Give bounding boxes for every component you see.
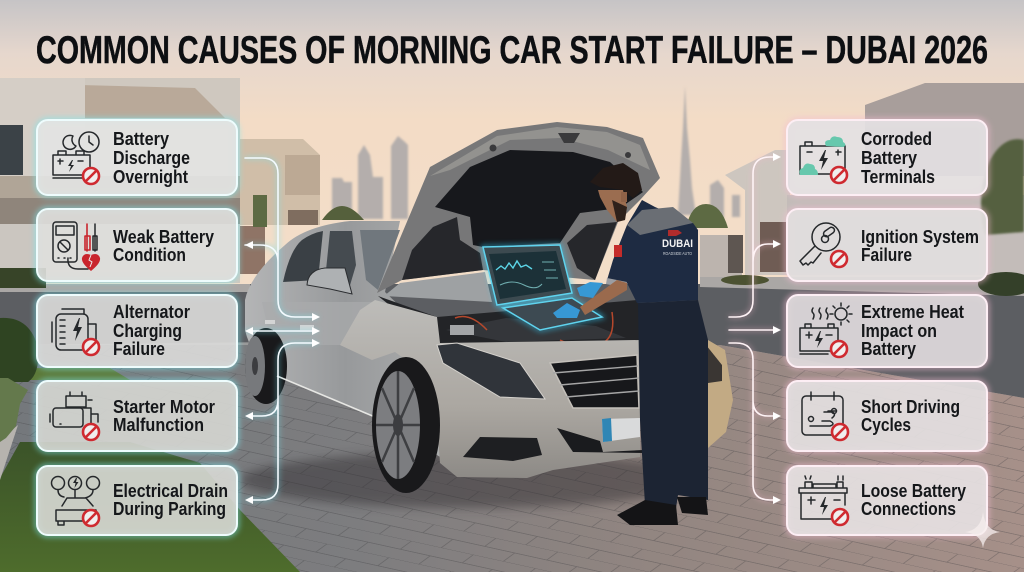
text: weak battery condition: Condition [113, 245, 186, 265]
front bumper and fender [340, 300, 640, 478]
text: weak battery condition: Weak Battery [113, 227, 215, 247]
chest logo [614, 230, 693, 257]
text: ignition system failure: Ignition System [861, 227, 979, 247]
paved driveway [0, 345, 1024, 572]
text: electrical drain during parking: Electrical Drain [113, 481, 228, 501]
road [0, 284, 1024, 398]
shadow under car [240, 452, 700, 508]
text: corroded battery terminals: Corroded [861, 129, 932, 149]
engine bay [378, 296, 650, 345]
text: starter motor malfunction: Starter Motor [113, 397, 215, 417]
panel: corroded battery terminals [787, 120, 987, 195]
icon: starter motor [50, 392, 99, 440]
sparkle mark [965, 512, 1000, 548]
text: short driving cycles: Cycles [861, 415, 911, 435]
text: starter motor malfunction: Malfunction [113, 415, 204, 435]
icon: calendar with route [802, 392, 848, 440]
windshield base [384, 272, 492, 302]
text: ignition system failure: Failure [861, 245, 912, 265]
text: loose battery connections: Loose Battery [861, 481, 967, 501]
text: alternator charging failure: Charging [113, 321, 182, 341]
car [245, 122, 733, 493]
head and hair [590, 163, 642, 222]
chest logo: DUBAI [662, 238, 693, 250]
forearm and gloves [580, 280, 627, 315]
headlight [437, 343, 545, 399]
skyline towers [332, 86, 740, 219]
number plate [602, 418, 640, 442]
text: extreme heat impact on battery: Extreme Heat [861, 302, 964, 322]
icon: car key [800, 223, 847, 267]
panel: short driving cycles [787, 381, 987, 451]
icon: loose battery [799, 476, 848, 525]
text: extreme heat impact on battery: Battery [861, 339, 917, 359]
icon: multimeter and broken heart [53, 222, 100, 271]
lower air intakes [463, 437, 542, 461]
text: corroded battery terminals: Terminals [861, 167, 935, 187]
chest logo: ROADSIDE AUTO [663, 251, 692, 256]
panel: extreme heat impact on battery [787, 295, 987, 367]
connectors: right side [729, 153, 781, 504]
text: short driving cycles: Short Driving [861, 397, 960, 417]
car side windows [283, 230, 400, 292]
panel: electrical drain during parking [37, 466, 237, 535]
rear wheel [245, 328, 287, 404]
boots [617, 497, 708, 525]
panel: ignition system failure [787, 209, 987, 281]
panel: weak battery condition [37, 209, 237, 281]
text: alternator charging failure: Alternator [113, 302, 190, 322]
lawn and plants [0, 318, 300, 572]
icon: battery, moon and clock [53, 132, 99, 184]
panel: loose battery connections [787, 466, 987, 535]
left houses [0, 78, 364, 283]
panel: starter motor malfunction [37, 381, 237, 451]
open hood [377, 122, 660, 293]
mechanic in navy uniform [553, 163, 708, 525]
icon: alternator [52, 309, 99, 355]
icon: battery with sun and heat [800, 303, 852, 357]
text: extreme heat impact on battery: Impact on [861, 321, 937, 341]
legs [638, 300, 708, 508]
icon: corroded battery [799, 136, 847, 183]
text: battery discharge overnight: Discharge [113, 148, 190, 168]
laptop with glowing diagnostic screen [483, 245, 602, 330]
text: loose battery connections: Connections [861, 499, 956, 519]
torso [607, 200, 698, 303]
right houses [686, 83, 1024, 285]
car side body [245, 221, 445, 460]
text: electrical drain during parking: During Parking [113, 499, 226, 519]
connectors: left side [245, 158, 320, 504]
text: alternator charging failure: Failure [113, 339, 165, 359]
door mirror [307, 268, 352, 294]
icon: car with electrical loads [52, 476, 100, 526]
panel: battery discharge overnight [37, 120, 237, 195]
radiator grille [550, 355, 639, 408]
text: battery discharge overnight: Overnight [113, 167, 188, 187]
door panel and handle [265, 320, 314, 330]
text: battery discharge overnight: Battery [113, 129, 170, 149]
panel: alternator charging failure [37, 295, 237, 367]
front wheel [372, 357, 440, 493]
text: corroded battery terminals: Battery [861, 148, 918, 168]
